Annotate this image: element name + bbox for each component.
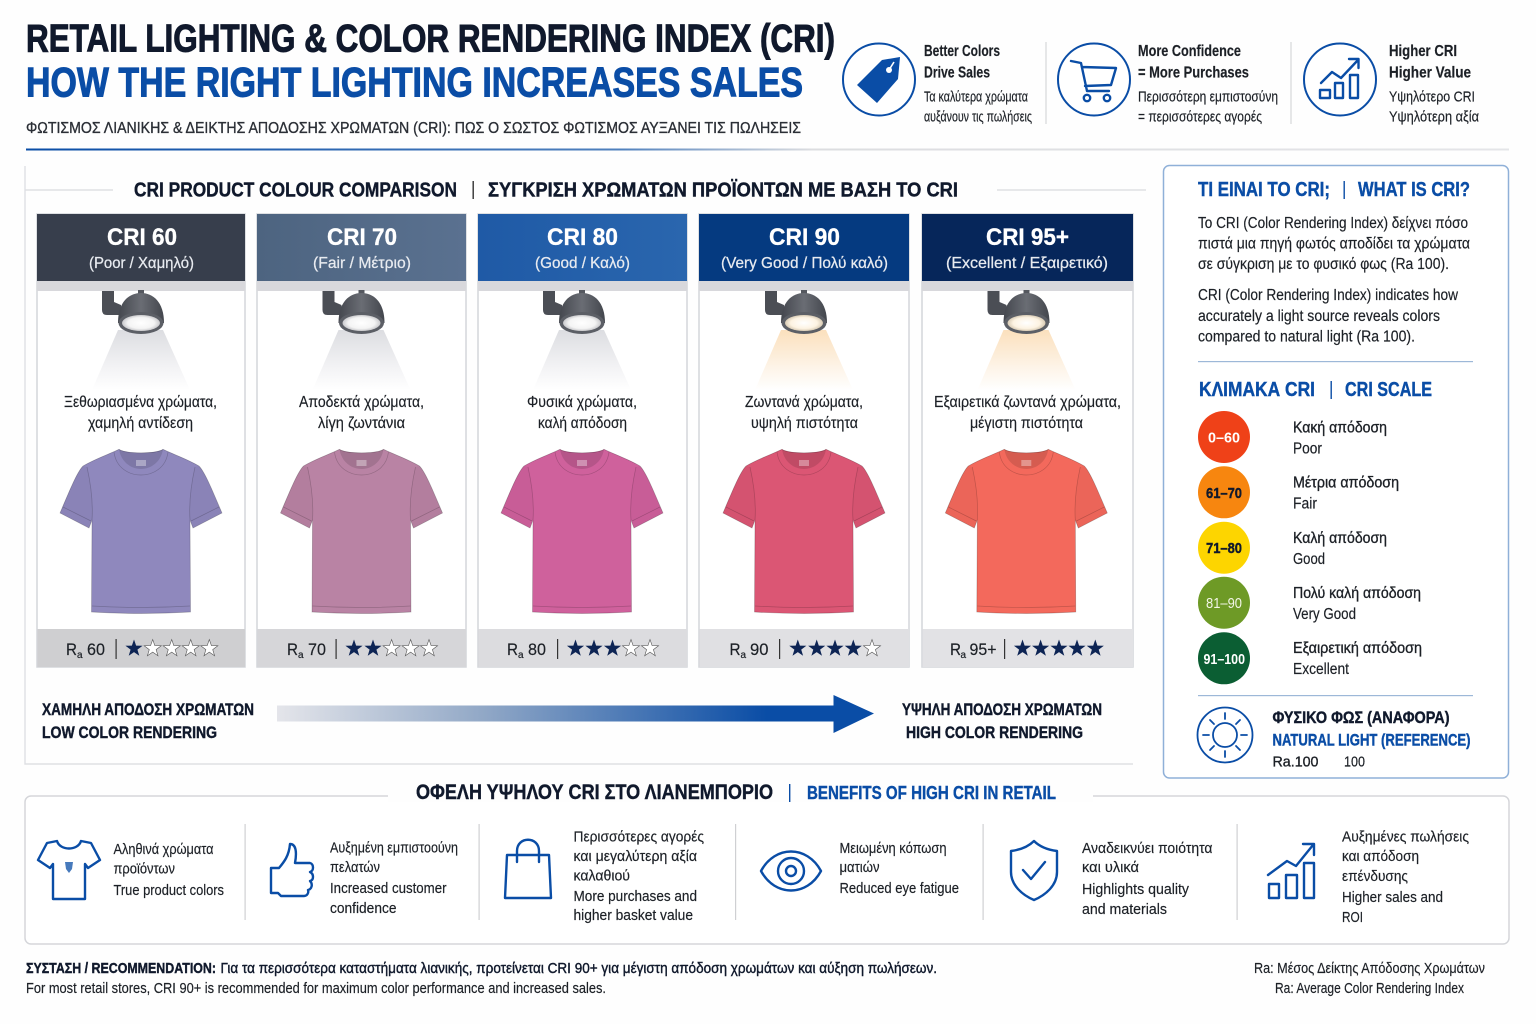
what is CRI heading [1198,179,1470,201]
spotlight [988,290,1050,334]
key message: more confidence: Περισσότερη εμπιστοσύνη [1138,90,1278,106]
what is CRI heading: WHAT IS CRI? [1358,179,1470,201]
scale: good: Καλή απόδοση [1293,530,1387,547]
scale: poor: Poor [1293,440,1322,458]
natural light reference: Ra.100 [1272,754,1318,770]
benefit: customer confidence [271,840,458,917]
card header: (Very Good / Πολύ καλό) [721,255,888,272]
card header [257,214,466,291]
title line 1: RETAIL LIGHTING & COLOR RENDERING INDEX (CRI) [26,18,835,60]
key message: higher value: Higher CRI [1389,43,1457,60]
rating bar: 70 [308,640,326,659]
comparison heading [134,179,958,202]
card: CRI 70 [257,214,466,667]
rating bar: R [950,640,961,659]
panel: what is CRI and scale [1164,166,1508,778]
recommendation: ΣΥΣΤΑΣΗ / RECOMMENDATION: [26,961,216,977]
card header: CRI 60 [107,224,177,251]
description: χαμηλή αντίδεση [88,415,193,432]
scale: fair: Μέτρια απόδοση [1293,474,1399,492]
light beam [312,330,410,390]
scale: fair: Fair [1293,496,1317,512]
greek explanation: Το CRI (Color Rendering Index) δείχνει πόσο [1198,215,1468,232]
what is CRI heading: ΤΙ ΕΙΝΑΙ ΤΟ CRI; [1198,179,1330,201]
card header: (Fair / Μέτριο) [313,255,411,272]
benefit: quality and materials: και υλικά [1082,859,1139,876]
light beam [978,330,1076,390]
scale: excellent [1198,632,1422,684]
description: Εξαιρετικά ζωντανά χρώματα, [934,394,1121,411]
benefit: true colors: προϊόντων [114,860,175,878]
scale: very good: Very Good [1293,606,1356,623]
icon: growth chart [1268,844,1314,898]
scale: good: Good [1293,551,1325,568]
scale heading: CRI SCALE [1345,379,1432,401]
scale: fair: 61–70 [1206,485,1242,502]
scale: very good [1198,577,1421,629]
rating bar [478,629,687,667]
t-shirt [501,449,663,614]
rating bar: 80 [528,640,546,659]
scale heading: ΚΛΙΜΑΚΑ CRI [1199,379,1315,401]
rating bar: a [77,650,83,661]
english explanation [1198,287,1459,346]
rating bar: R [287,640,298,659]
benefit: reduced eye fatigue: Reduced eye fatigue [840,880,959,897]
description: Φυσικά χρώματα, [527,394,637,411]
recommendation [26,961,937,997]
card header [699,214,909,291]
high label [902,701,1102,742]
description: Ξεθωριασμένα χρώματα, [64,394,217,411]
title line 2: HOW THE RIGHT LIGHTING INCREASES SALES [26,58,803,106]
benefit: customer confidence: confidence [330,900,396,917]
scale: very good: Πολύ καλή απόδοση [1293,585,1421,602]
benefit: sales and ROI: και απόδοση [1342,848,1419,865]
low label [42,701,254,742]
key message: more confidence: = More Purchases [1138,64,1249,82]
benefit: basket value: higher basket value [574,907,693,924]
description: μέγιστη πιστότητα [970,415,1083,432]
rating bar: 90 [750,640,768,659]
rating bar: R [507,640,518,659]
scale: excellent: Excellent [1293,661,1350,678]
icon: eye [761,852,821,890]
rating bar [38,629,245,667]
greek explanation: σε σύγκριση με το φυσικό φως (Ra 100). [1198,256,1449,273]
benefit: sales and ROI: Αυξημένες πωλήσεις [1342,828,1469,846]
scale: excellent: Εξαιρετική απόδοση [1293,640,1422,657]
icon: t-shirt [38,841,100,899]
key message: higher value: Υψηλότερη αξία [1389,110,1479,126]
card header: CRI 90 [769,224,840,251]
key message: better colors [843,43,1032,126]
benefit: sales and ROI: Higher sales and [1342,889,1443,906]
card header [922,214,1133,291]
rating bar: a [960,650,966,661]
description [64,394,217,432]
key message: higher value [1304,43,1479,126]
card: CRI 90 [699,214,909,667]
greek subtitle: ΦΩΤΙΣΜΟΣ ΛΙΑΝΙΚΗΣ & ΔΕΙΚΤΗΣ ΑΠΟΔΟΣΗΣ ΧΡΩΜΑΤΩΝ (CRI): ΠΩΣ Ο ΣΩΣΤΟΣ ΦΩΤΙΣΜΟΣ ΑΥΞΑΝΕΙ ΤΙΣ ΠΩΛΗΣΕΙΣ [26,120,801,137]
light beam [92,330,190,390]
benefit: sales and ROI: επένδυσης [1342,868,1408,885]
key message: more confidence: More Confidence [1138,43,1241,60]
low label: LOW COLOR RENDERING [42,724,217,742]
icon: thumbs up [271,844,313,896]
card header: (Poor / Χαμηλό) [89,255,194,272]
key message: better colors: Drive Sales [924,64,990,82]
english explanation: CRI (Color Rendering Index) indicates how [1198,287,1459,304]
benefit: sales and ROI: ROI [1342,909,1363,926]
high label: HIGH COLOR RENDERING [906,724,1083,742]
panel: product colour comparison [25,166,1146,764]
benefit: customer confidence: πελατών [330,859,380,876]
t-shirt [723,449,885,614]
light beam [755,330,853,390]
greek explanation [1198,215,1470,273]
rating bar [922,629,1133,667]
card: CRI 95+ [922,214,1133,667]
benefit: customer confidence: Αυξημένη εμπιστοούνη [330,840,458,856]
benefit: true colors [38,841,224,899]
card: CRI 60 [37,214,245,667]
scale: good: 71–80 [1206,540,1242,557]
key message: higher value: Higher Value [1389,64,1471,82]
english explanation: compared to natural light (Ra 100). [1198,328,1415,346]
scale: excellent: 91–100 [1204,651,1245,668]
card header: (Excellent / Εξαιρετικό) [946,255,1108,272]
card: CRI 80 [478,214,687,667]
key message: better colors: Better Colors [924,43,1000,60]
footnote: Ra definition [1254,961,1485,997]
benefit: sales and ROI [1268,828,1469,926]
spotlight [322,290,384,334]
english explanation: accurately a light source reveals colors [1198,308,1440,325]
benefit: customer confidence: Increased customer [330,880,446,897]
benefit: basket value [505,828,704,924]
benefit: reduced eye fatigue [761,840,959,897]
card header [37,214,245,291]
rating bar: a [740,650,746,661]
natural light reference: ΦΥΣΙΚΟ ΦΩΣ (ΑΝΑΦΟΡΑ) [1272,709,1450,727]
key message: higher value: Υψηλότερο CRI [1389,90,1475,106]
description: Αποδεκτά χρώματα, [299,394,424,411]
scale: good [1198,522,1387,574]
rating bar: a [298,650,304,661]
description: Ζωντανά χρώματα, [745,394,863,411]
description [934,394,1121,432]
scale: poor [1198,411,1387,463]
benefit: true colors: True product colors [114,882,224,899]
scale: poor: Κακή απόδοση [1293,420,1387,436]
scale heading [1199,379,1432,401]
rating bar [700,629,909,667]
scale: very good: 81–90 [1206,595,1242,612]
key message: better colors: αυξάνουν τις πωλήσεις [924,110,1032,126]
description [527,394,637,432]
key message: better colors: Τα καλύτερα χρώματα [924,90,1028,106]
scale: fair [1198,466,1399,518]
icon: shopping cart [1058,44,1130,116]
key message: more confidence [1058,43,1278,126]
icon: sun [1198,708,1252,762]
natural light reference: 100 [1344,754,1365,770]
footnote: Ra definition: Ra: Average Color Rendering Index [1275,981,1465,997]
footnote: Ra definition: Ra: Μέσος Δείκτης Απόδοσης Χρωμάτων [1254,961,1485,977]
scale: poor: 0–60 [1208,430,1240,446]
t-shirt [280,449,442,614]
arrow [277,695,874,733]
spotlight [543,290,605,334]
benefit: true colors: Αληθινά χρώματα [114,841,214,858]
benefit: reduced eye fatigue: Μειωμένη κόπωση [840,840,946,857]
benefits heading: ΟΦΕΛΗ ΥΨΗΛΟΥ CRI ΣΤΟ ΛΙΑΝΕΜΠΟΡΙΟ [416,781,773,804]
spotlight [102,290,164,334]
benefit: basket value: καλαθιού [574,868,630,884]
icon: shield check [1011,841,1057,900]
panel: benefits of high CRI [25,781,1509,944]
icon: rising chart [1304,44,1376,116]
benefit: quality and materials [1011,840,1213,918]
recommendation: Για τα περισσότερα καταστήματα λιανικής, προτείνεται CRI 90+ για μέγιστη απόδοση χρωμάτων και αύξηση πωλήσεων. [220,961,937,977]
t-shirt [945,449,1107,614]
benefit: basket value: και μεγαλύτερη αξία [574,848,697,865]
rating bar [258,629,466,667]
benefit: quality and materials: Highlights quality [1082,881,1189,898]
comparison heading: ΣΥΓΚΡΙΣΗ ΧΡΩΜΑΤΩΝ ΠΡΟΪΟΝΤΩΝ ΜΕ ΒΑΣΗ ΤΟ CRI [488,179,958,202]
benefit: reduced eye fatigue: ματιών [840,859,880,876]
card header: CRI 70 [327,224,397,251]
card header: CRI 95+ [986,224,1069,251]
benefits heading [416,781,1056,804]
card header: (Good / Καλό) [535,255,630,272]
natural light reference: NATURAL LIGHT (REFERENCE) [1272,732,1470,750]
recommendation: For most retail stores, CRI 90+ is recommended for maximum color performance and increased sales. [26,981,606,997]
description: καλή απόδοση [538,415,627,432]
description: υψηλή πιστότητα [751,415,858,432]
rating bar: 60 [87,640,105,659]
description: λίγη ζωντάνια [318,415,405,432]
description [299,394,424,432]
high label: ΥΨΗΛΗ ΑΠΟΔΟΣΗ ΧΡΩΜΑΤΩΝ [902,701,1102,719]
low to high rendering scale [42,695,1102,742]
natural light reference [1198,708,1470,770]
card header: CRI 80 [547,224,618,251]
light beam [533,330,631,390]
comparison heading: CRI PRODUCT COLOUR COMPARISON [134,180,457,202]
title block [26,18,835,137]
card header [478,214,687,291]
t-shirt [60,449,222,614]
rating bar: R [66,640,77,659]
spotlight [765,290,827,334]
low label: ΧΑΜΗΛΗ ΑΠΟΔΟΣΗ ΧΡΩΜΑΤΩΝ [42,701,254,719]
benefit: quality and materials: Αναδεικνύει ποιότητα [1082,840,1213,857]
greek explanation: πιστά μια πηγή φωτός αποδίδει τα χρώματα [1198,236,1470,252]
benefit: quality and materials: and materials [1082,901,1167,918]
benefit: basket value: More purchases and [574,888,697,905]
rating bar: R [730,640,740,659]
benefit: basket value: Περισσότερες αγορές [574,828,704,846]
description [745,394,863,432]
rating bar: 95+ [970,640,997,659]
benefits heading: BENEFITS OF HIGH CRI IN RETAIL [807,782,1056,803]
key message: more confidence: = περισσότερες αγορές [1138,110,1262,126]
rating bar: a [518,650,524,661]
icon: shopping bag [505,840,551,898]
icon: price tag [843,44,915,116]
